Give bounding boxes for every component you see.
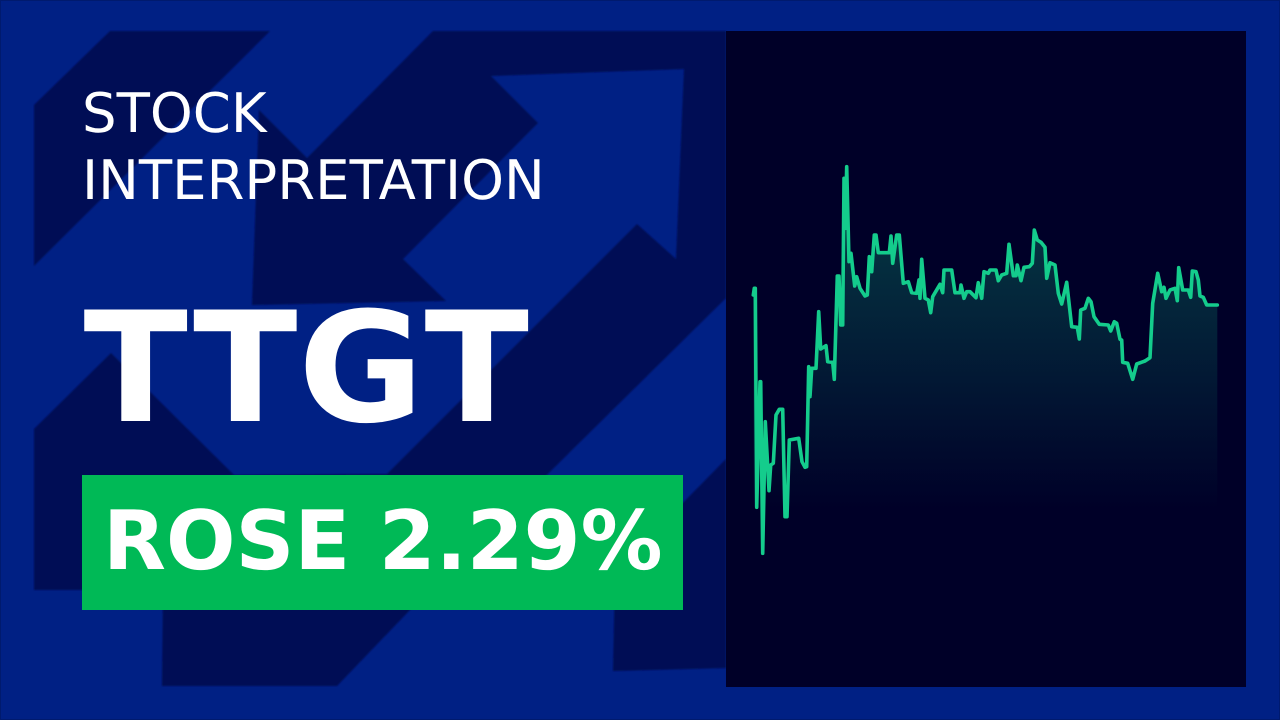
badge text: ROSE 2.29% xyxy=(103,494,663,589)
chart area fill xyxy=(753,167,1217,553)
title: stock interpretation: INTERPRETATION xyxy=(82,148,545,212)
ticker symbol: TTGT xyxy=(84,280,529,458)
title: stock interpretation xyxy=(82,81,545,212)
title: stock interpretation: STOCK xyxy=(82,81,267,145)
panel: price chart xyxy=(726,31,1246,687)
badge: rose percentage xyxy=(82,475,683,610)
panel background xyxy=(726,31,1246,687)
chart price line xyxy=(753,167,1217,553)
